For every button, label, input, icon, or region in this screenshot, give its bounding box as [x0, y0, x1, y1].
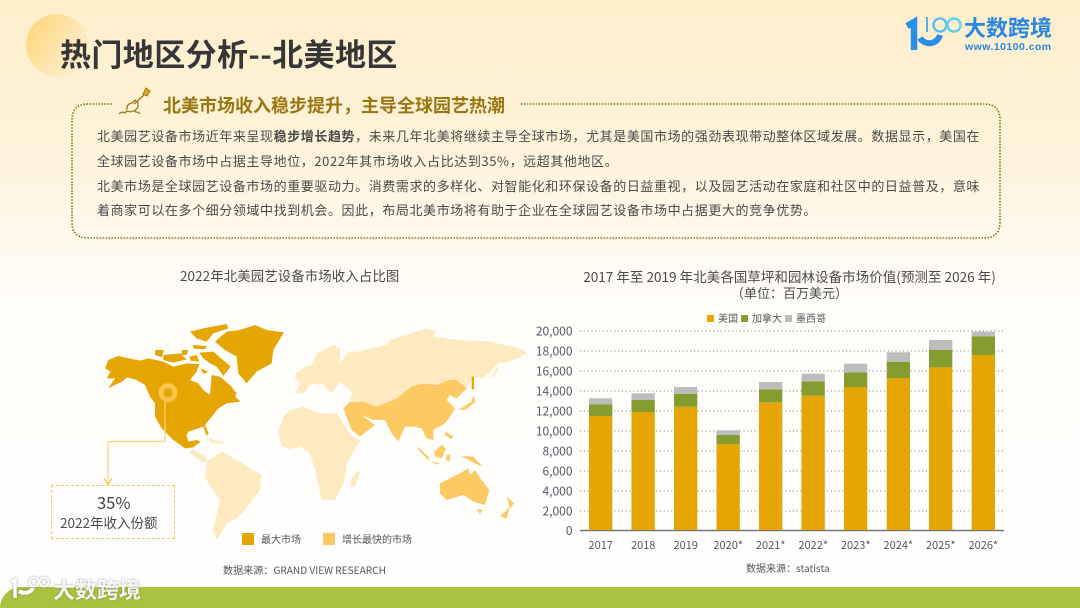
- body text block: 北美市场是全球园艺设备市场的重要驱动力。消费需求的多样化、对智能化和环保设备的日益重视，以及园艺活动在家庭和社区中的日益普及，意味: [97, 176, 980, 195]
- logo: 10100 大数跨境: www.10100.com: [965, 41, 1052, 53]
- body text block: 全球园艺设备市场中占据主导地位，2022年其市场收入占比达到35%，远超其他地区。: [97, 151, 618, 170]
- map legend: 增长最快的市场: [342, 531, 412, 546]
- stacked bar chart: 2017: [588, 537, 613, 553]
- stacked bar chart: 16,000: [536, 362, 573, 380]
- stacked bar chart: 14,000: [536, 382, 573, 400]
- stacked bar chart: 2026*: [969, 537, 998, 553]
- stacked bar chart: 6,000: [543, 462, 573, 480]
- stacked bar chart: 2020*: [713, 537, 743, 553]
- chart legend: 加拿大: [752, 310, 782, 325]
- stacked bar chart: 10,000: [536, 422, 573, 440]
- stacked bar chart: 12,000: [536, 402, 573, 420]
- logo: 10100 大数跨境: [905, 11, 1052, 53]
- panel: North America summary: [71, 103, 1001, 239]
- body text block: [97, 126, 980, 219]
- map legend: [242, 531, 412, 546]
- body text block: 北美园艺设备市场近年来呈现稳步增长趋势，未来几年北美将继续主导全球市场，尤其是美国市场的强劲表现带动整体区域发展。数据显示，美国在: [97, 126, 980, 145]
- title sun decoration: [26, 14, 88, 76]
- stacked bar chart: 2025*: [926, 537, 955, 553]
- stacked bar chart: 2019: [673, 537, 698, 553]
- stacked bar chart: 2024*: [884, 537, 913, 553]
- stacked bar chart: 2018: [631, 537, 655, 553]
- body text block: 着商家可以在多个细分领域中找到机会。因此，布局北美市场将有助于企业在全球园艺设备市场中占据更大的竞争优势。: [97, 200, 817, 219]
- map legend: 最大市场: [261, 531, 301, 546]
- callout: 35% revenue share: 35%: [97, 490, 131, 514]
- marker and leader line: [104, 386, 175, 485]
- icon: shovel: [118, 87, 151, 114]
- callout: 35% revenue share: 2022年收入份额: [60, 512, 157, 532]
- panel heading: 北美市场收入稳步提升，主导全球园艺热潮: [163, 92, 505, 118]
- chart legend: 美国: [718, 310, 738, 325]
- stacked bar chart: 2023*: [841, 537, 870, 553]
- stacked bar chart: 20,000: [536, 322, 573, 340]
- chart legend: 墨西哥: [796, 310, 826, 325]
- map source: 数据来源：GRAND VIEW RESEARCH: [223, 562, 386, 577]
- stacked bar chart: 2021*: [756, 537, 785, 553]
- map title: 2022年北美园艺设备市场收入占比图: [180, 265, 399, 285]
- stacked bar chart: [536, 322, 1004, 553]
- chart source: 数据来源：statista: [746, 560, 830, 575]
- chart title: [583, 266, 996, 302]
- watermark logo: 大数跨境: [53, 573, 141, 605]
- logo: 10100 大数跨境: 大数跨境: [964, 11, 1052, 43]
- chart title: 2017 年至 2019 年北美各国草坪和园林设备市场价值(预测至 2026 年): [583, 266, 996, 286]
- stacked bar chart: 8,000: [543, 442, 573, 460]
- title: 热门地区分析--北美地区: [60, 30, 398, 75]
- stacked bar chart: 2022*: [798, 537, 828, 553]
- chart legend: [707, 310, 826, 325]
- watermark logo: [9, 573, 141, 605]
- world map: [104, 324, 528, 540]
- stacked bar chart: 18,000: [536, 342, 573, 360]
- chart title: （单位：百万美元）: [731, 283, 848, 302]
- footer green band: [0, 587, 1080, 608]
- stacked bar chart: 2,000: [543, 502, 573, 520]
- stacked bar chart: 0: [566, 522, 573, 539]
- stacked bar chart: 4,000: [543, 482, 573, 500]
- callout: 35% revenue share: [51, 485, 175, 539]
